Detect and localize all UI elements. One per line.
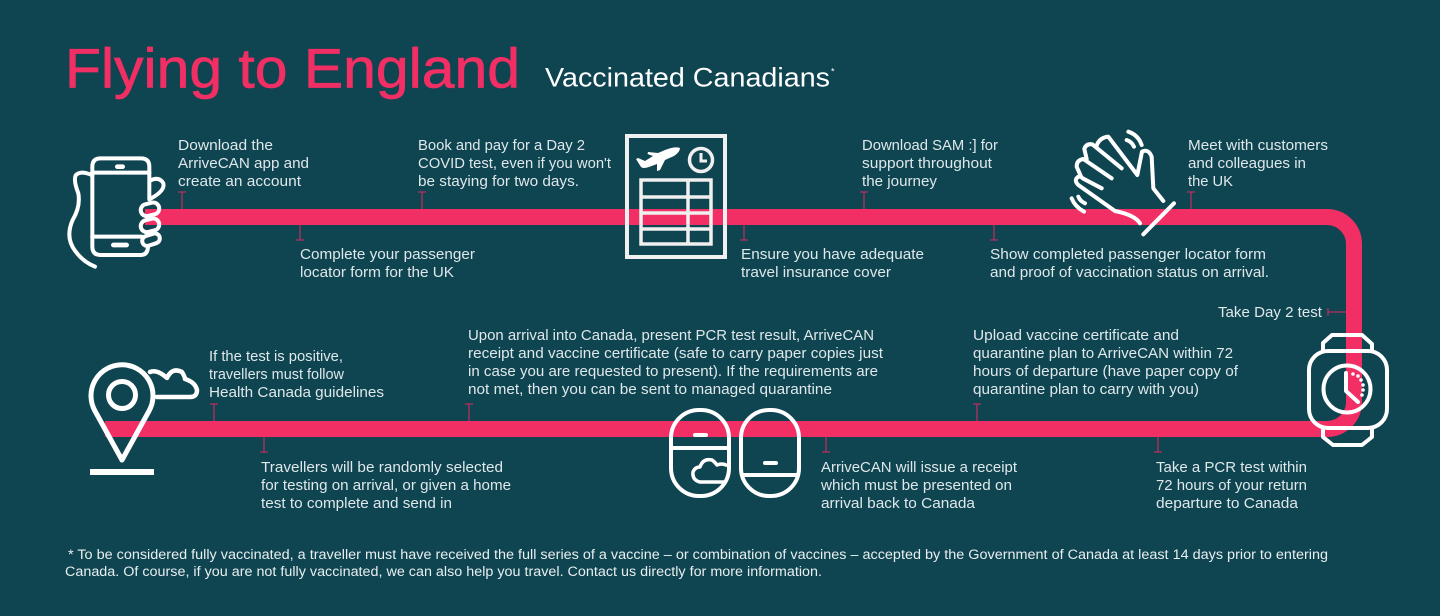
step: show documents on arrival [990,246,1269,281]
step: random testing: Travellers will be randomly selected [261,459,503,476]
step: upload certificate: quarantine plan to ArriveCAN within 72 [973,345,1233,362]
step: random testing: test to complete and send in [261,495,452,512]
subtitle: * [831,66,835,76]
step: download app: ArriveCAN app and [178,155,309,172]
step: random testing: for testing on arrival, or given a home [261,477,511,494]
step: PCR test: Take a PCR test within [1156,459,1307,476]
step: book day 2 test: COVID test, even if you won't [418,155,612,172]
step: show documents on arrival: and proof of vaccination status on arrival. [990,264,1269,281]
step: travel insurance: Ensure you have adequate [741,246,924,263]
title: Flying to England [65,36,520,100]
step: random testing [261,459,511,512]
step: book day 2 test [418,137,612,190]
step: PCR test: departure to Canada [1156,495,1299,512]
step: receipt: arrival back to Canada [821,495,976,512]
step: arrival into Canada [468,327,884,398]
icon: phone in hand [69,158,164,267]
step: positive test: Health Canada guidelines [209,384,384,401]
step: upload certificate: quarantine plan to carry with you) [973,381,1199,398]
step: travel insurance [741,246,924,281]
step: positive test: travellers must follow [209,366,344,383]
step: positive test: If the test is positive, [209,348,343,365]
step: arrival into Canada: in case you are requested to present). If the requirements are [468,363,878,380]
step: book day 2 test: be staying for two days. [418,173,579,190]
step: day 2 test: Take Day 2 test [1218,304,1323,321]
step: upload certificate [973,327,1239,398]
step: passenger locator form: Complete your passenger [300,246,475,263]
step: download app: create an account [178,173,302,190]
step: PCR test: 72 hours of your return [1156,477,1307,494]
step: passenger locator form: locator form for the UK [300,264,454,281]
step: meet customers: the UK [1188,173,1233,190]
icon: aeroplane windows [671,410,799,496]
icon: flight document [627,136,725,257]
step: download app: Download the [178,137,273,154]
step: book day 2 test: Book and pay for a Day 2 [418,137,585,154]
step: upload certificate: Upload vaccine certificate and [973,327,1179,344]
step: positive test [209,348,384,401]
step: arrival into Canada: Upon arrival into Canada, present PCR test result, ArriveCAN [468,327,874,344]
step: arrival into Canada: receipt and vaccine certificate (safe to carry paper copies just [468,345,884,362]
step: passenger locator form [300,246,475,281]
step: PCR test [1156,459,1307,512]
icon: location pin with cloud [90,365,197,472]
step: receipt [820,459,1018,512]
step: meet customers: and colleagues in [1188,155,1306,172]
step: meet customers: Meet with customers [1188,137,1328,154]
icon: watch [1309,335,1387,445]
timeline route [105,217,1354,429]
step: download SAM: Download SAM :] for [862,137,998,154]
step: arrival into Canada: not met, then you can be sent to managed quarantine [468,381,832,398]
icon: clock [690,148,712,172]
step: upload certificate: hours of departure (have paper copy of [973,363,1239,380]
step: travel insurance: travel insurance cover [741,264,891,281]
step: receipt: ArriveCAN will issue a receipt [821,459,1018,476]
icon: waving hand [1072,132,1174,234]
icon: plane [636,147,680,171]
step: show documents on arrival: Show completed passenger locator form [990,246,1266,263]
footnote: Canada. Of course, if you are not fully vaccinated, we can also help you travel. Contact us directly for more information. [65,564,822,579]
step: receipt: which must be presented on [820,477,1012,494]
step: download app [178,137,309,190]
step: meet customers [1188,137,1328,190]
step: download SAM: the journey [862,173,938,190]
footnote [65,547,1328,579]
step: download SAM [862,137,998,190]
step: download SAM: support throughout [862,155,993,172]
timeline tick marks [178,192,1346,452]
subtitle: Vaccinated Canadians [545,63,830,93]
footnote: * To be considered fully vaccinated, a traveller must have received the full series of a vaccine – or combination of vaccines – accepted by the Government of Canada at least 14 days prior to entering [68,547,1328,562]
